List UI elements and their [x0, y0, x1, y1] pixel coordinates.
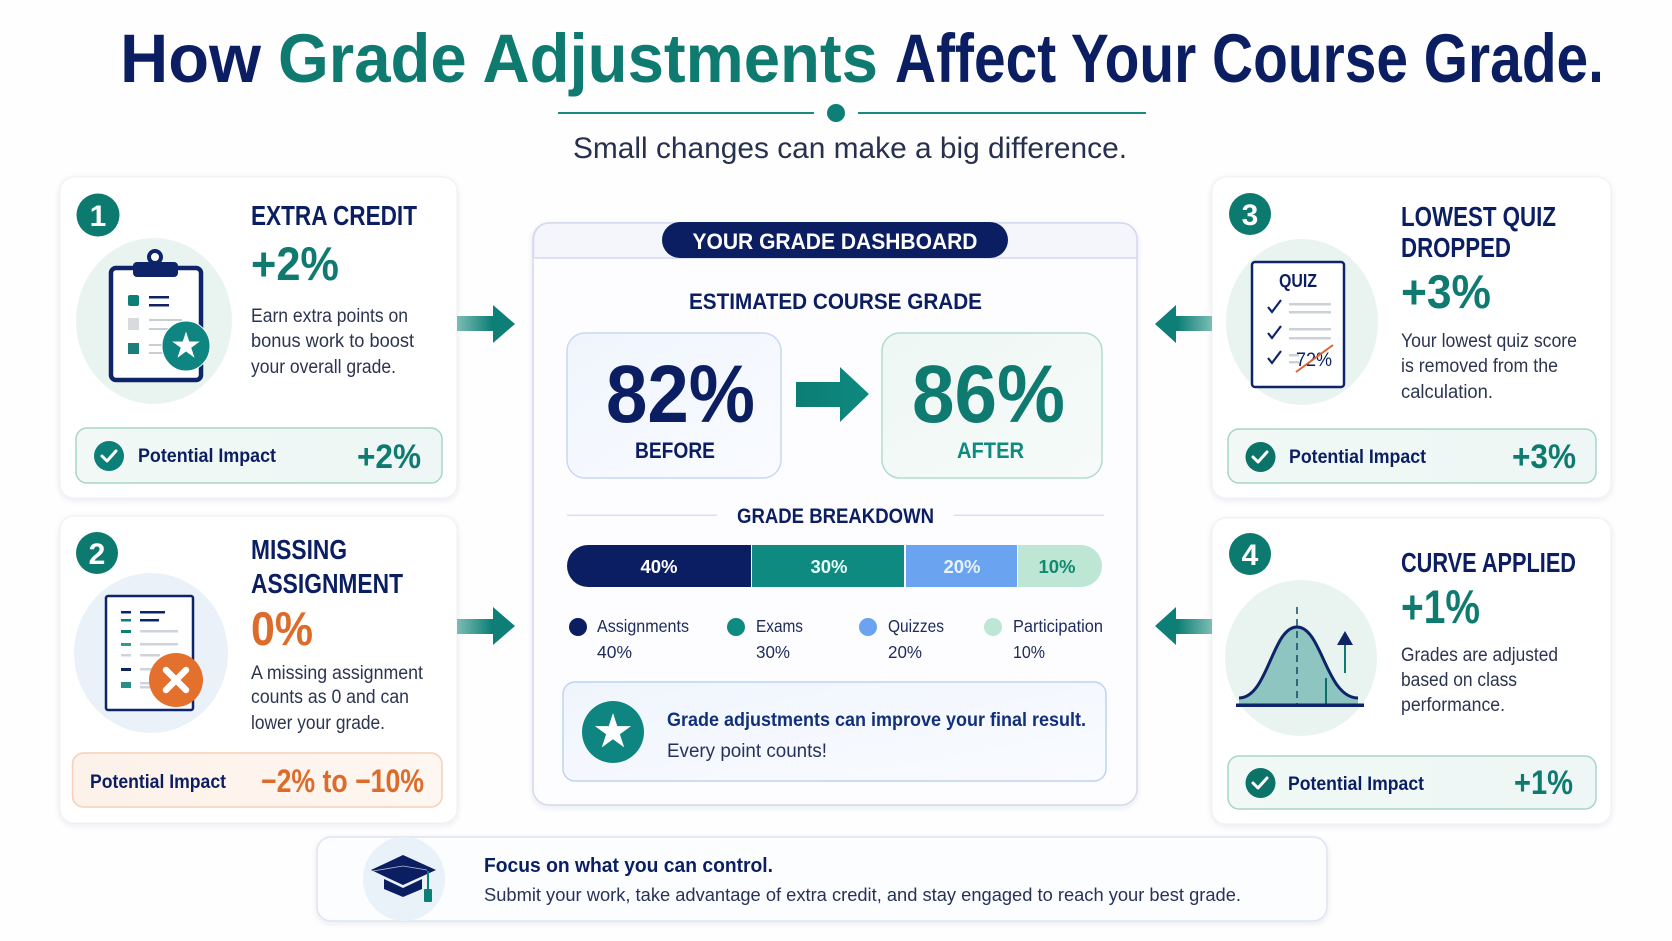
arrow: card 4 to dashboard	[1155, 607, 1212, 645]
icon: graduation cap	[363, 837, 445, 921]
arrow: card 3 to dashboard	[1155, 305, 1212, 343]
badge 4	[1229, 533, 1271, 575]
subtitle: Small changes can make a big difference.	[573, 132, 1127, 165]
panel: missing assignment	[60, 516, 457, 823]
panel: lowest quiz dropped	[1212, 177, 1611, 498]
icon: quiz sheet	[1226, 239, 1378, 405]
badge 4: 4	[1242, 539, 1259, 572]
panel: extra credit	[60, 177, 457, 498]
impact bar: +3%	[1228, 429, 1596, 483]
header pill	[662, 222, 1008, 258]
heading: lowest quiz dropped: DROPPED	[1401, 232, 1511, 263]
badge 2	[76, 532, 118, 574]
impact bar: +1%: Potential Impact	[1288, 774, 1425, 795]
description: bonus work to boost	[251, 331, 415, 352]
impact bar: -2% to -10%	[72, 753, 442, 807]
heading: missing assignment	[251, 534, 403, 599]
impact bar: +2%: +2%	[357, 438, 421, 476]
description: lower your grade.	[251, 713, 385, 734]
title: How	[120, 20, 261, 97]
badge 2: 2	[89, 538, 105, 571]
title	[120, 20, 1604, 97]
legend	[569, 616, 1103, 662]
description	[251, 306, 415, 378]
focus text: Submit your work, take advantage of extra credit, and stay engaged to reach your best grade.	[484, 884, 1241, 905]
heading: missing assignment: MISSING	[251, 534, 347, 565]
impact bar: -2% to -10%: Potential Impact	[90, 772, 227, 793]
legend: participation	[984, 616, 1103, 662]
description: based on class	[1401, 670, 1517, 691]
focus text: Focus on what you can control.	[484, 854, 773, 877]
title divider	[558, 104, 1146, 122]
legend: assignments: Assignments	[597, 616, 689, 636]
arrow: card 1 to dashboard	[457, 305, 515, 343]
title: Grade Adjustments	[278, 20, 878, 97]
callout: Every point counts!	[667, 740, 827, 762]
description: calculation.	[1401, 382, 1493, 403]
arrow: before to after	[796, 367, 869, 422]
heading: estimated course grade: ESTIMATED COURSE GRADE	[689, 289, 982, 314]
callout	[563, 682, 1106, 781]
description: Earn extra points on	[251, 306, 408, 327]
description: A missing assignment	[251, 663, 424, 684]
impact bar: +3%: +3%	[1512, 438, 1576, 476]
heading: curve applied: CURVE APPLIED	[1401, 547, 1576, 578]
badge 3: 3	[1242, 199, 1258, 232]
heading: lowest quiz dropped: LOWEST QUIZ	[1401, 201, 1556, 232]
value: +3%: +3%	[1401, 265, 1491, 318]
description: Grades are adjusted	[1401, 645, 1558, 666]
legend: quizzes	[859, 616, 944, 662]
description: performance.	[1401, 695, 1505, 716]
grade breakdown heading: GRADE BREAKDOWN	[737, 505, 934, 528]
legend: exams	[727, 616, 803, 662]
value: 0%: 0%	[251, 602, 313, 655]
panel: grade dashboard	[533, 222, 1137, 805]
legend: participation: 10%	[1013, 642, 1045, 662]
badge 1: 1	[90, 200, 106, 233]
header band	[534, 223, 1137, 258]
icon: quiz sheet: 72%	[1296, 350, 1332, 371]
value: +1%: +1%	[1401, 580, 1480, 633]
callout: Grade adjustments can improve your final result.	[667, 709, 1086, 731]
focus text	[484, 854, 1241, 905]
legend: assignments	[569, 616, 689, 662]
icon: bell curve	[1225, 580, 1377, 736]
after box: 86%	[912, 349, 1065, 440]
description	[251, 663, 424, 734]
description	[1401, 331, 1577, 403]
after box	[882, 333, 1102, 478]
icon: clipboard with star	[76, 238, 232, 404]
legend: quizzes: Quizzes	[888, 616, 944, 636]
description: is removed from the	[1401, 356, 1558, 377]
legend: assignments: 40%	[597, 642, 632, 662]
stacked bar chart: 10%	[1038, 556, 1076, 577]
legend: exams: 30%	[756, 642, 790, 662]
value: +2%: +2%	[251, 237, 339, 290]
before box: 82%	[606, 349, 755, 440]
impact bar: +3%: Potential Impact	[1289, 447, 1427, 468]
description	[1401, 645, 1558, 716]
icon: assignment sheet with x	[74, 573, 228, 733]
arrow: card 2 to dashboard	[457, 607, 515, 645]
badge 1	[76, 194, 120, 236]
before box: BEFORE	[635, 438, 715, 463]
panel: curve applied	[1212, 518, 1611, 824]
icon: quiz sheet: QUIZ	[1279, 271, 1317, 291]
legend: participation: Participation	[1013, 616, 1103, 636]
impact bar: +2%: Potential Impact	[138, 446, 277, 467]
legend: exams: Exams	[756, 616, 803, 636]
stacked bar chart: 30%	[810, 556, 848, 577]
stacked bar chart	[567, 545, 1102, 587]
impact bar: +1%	[1228, 756, 1596, 809]
heading: missing assignment: ASSIGNMENT	[251, 568, 403, 599]
impact bar: +2%	[76, 428, 442, 483]
stacked bar chart: 20%	[943, 556, 981, 577]
header pill: YOUR GRADE DASHBOARD	[692, 229, 978, 254]
after box: AFTER	[957, 438, 1024, 463]
description: counts as 0 and can	[251, 687, 409, 708]
heading: lowest quiz dropped	[1401, 201, 1556, 263]
legend: quizzes: 20%	[888, 642, 922, 662]
heading: extra credit: EXTRA CREDIT	[251, 200, 417, 231]
badge 3	[1229, 193, 1271, 235]
panel: focus banner	[317, 837, 1327, 921]
impact bar: -2% to -10%: −2% to −10%	[261, 763, 424, 799]
description: your overall grade.	[251, 357, 396, 378]
description: Your lowest quiz score	[1401, 331, 1577, 352]
stacked bar chart: 40%	[640, 556, 678, 577]
before box	[567, 333, 781, 478]
impact bar: +1%: +1%	[1514, 764, 1573, 802]
